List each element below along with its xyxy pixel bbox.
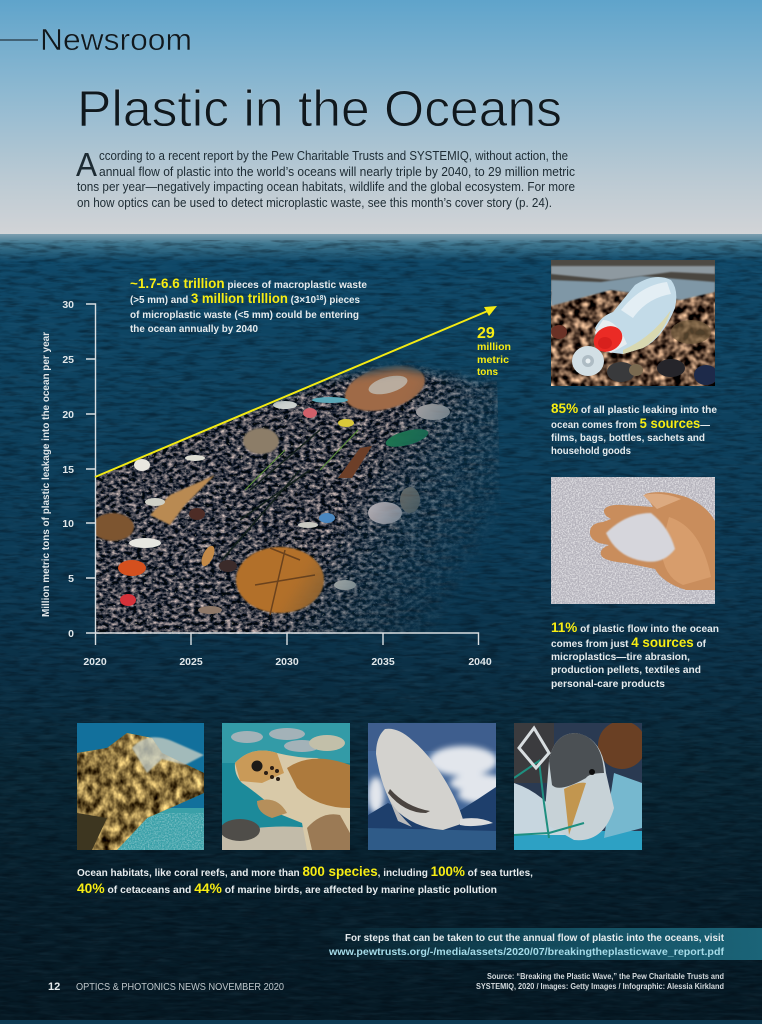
text: 11% four sources: 11% of plastic flow into the ocean	[551, 619, 719, 635]
callout: pieces of plastic waste: ~1.7-6.6 trillion pieces of macroplastic waste	[130, 275, 367, 291]
callout: 29 million metric tons: 29	[477, 325, 495, 342]
text: 11% four sources: personal-care products	[551, 678, 665, 690]
callout: 29 million metric tons: tons	[477, 366, 498, 378]
bottle	[589, 277, 676, 357]
y tick labels: 0	[68, 628, 74, 640]
link band: steps and URL	[320, 928, 762, 960]
y tick labels: 10	[62, 518, 74, 530]
title: Plastic in the Oceans	[77, 80, 562, 137]
callout: pieces of plastic waste	[130, 275, 367, 335]
x tick labels: 2035	[371, 656, 395, 668]
link band: steps and URL: For steps that can be taken to cut the annual flow of plastic into the oceans, visit	[345, 932, 724, 944]
caption: species affected	[77, 863, 533, 896]
text: 85% five sources: 85% of all plastic leaking into the	[551, 400, 717, 416]
callout: pieces of plastic waste: )	[323, 294, 327, 306]
y tick labels: 25	[62, 354, 74, 366]
x tick labels: 2020	[83, 656, 107, 668]
callout: 29 million metric tons: million	[477, 341, 511, 353]
trend arrow	[95, 306, 497, 477]
footer: page number and publication: OPTICS & PHOTONICS NEWS NOVEMBER 2020	[76, 982, 284, 993]
intro text block: on how optics can be used to detect microplastic waste, see this month’s cover story (p. 24).	[77, 196, 552, 210]
x tick labels	[83, 656, 492, 668]
x axis	[86, 633, 478, 645]
section label: Newsroom: Newsroom	[40, 23, 192, 57]
y tick labels: 15	[62, 464, 74, 476]
callout: 29 million metric tons	[477, 325, 511, 378]
intro text block: tons per year—negatively impacting ocean habitats, wildlife and the global ecosystem. For more	[77, 180, 575, 194]
callout: 29 million metric tons: metric	[477, 354, 509, 366]
source credit	[476, 972, 724, 991]
photo: hand with plastic pellets	[551, 477, 715, 604]
chart image: floating plastic debris	[96, 361, 500, 634]
callout: pieces of plastic waste: pieces	[330, 294, 362, 306]
intro text block: A	[76, 146, 97, 183]
intro text block: annual flow of plastic into the world’s oceans will nearly triple by 2040, to 29 million metric	[99, 165, 575, 179]
callout: pieces of plastic waste: of microplastic waste (<5 mm) could be entering	[130, 309, 359, 321]
y tick labels: 5	[68, 573, 74, 585]
photo: plastic bottle on pebbles	[551, 260, 715, 386]
text: 11% four sources: production pellets, textiles and	[551, 664, 701, 676]
y tick labels	[62, 299, 74, 640]
text: 11% four sources	[551, 619, 719, 690]
text: 85% five sources: ocean comes from 5 sources—	[551, 415, 710, 431]
text: 11% four sources: comes from just 4 sources of	[551, 634, 706, 650]
y axis	[86, 304, 96, 633]
bottle cap	[572, 346, 604, 376]
y tick labels: 30	[62, 299, 74, 311]
hand	[590, 492, 715, 590]
y tick labels: 20	[62, 409, 74, 421]
text: 11% four sources: microplastics—tire abrasion,	[551, 651, 690, 663]
caption: species affected: 40% of cetaceans and 44% of marine birds, are affected by marine plastic pollution	[77, 880, 497, 896]
photo: coral reef with plastic	[77, 723, 204, 850]
photo: seabird entangled in netting	[514, 723, 642, 850]
x tick labels: 2030	[275, 656, 299, 668]
pellet mound	[606, 513, 675, 562]
photo: sea turtle	[222, 723, 350, 850]
background: ocean	[0, 234, 762, 1024]
callout: pieces of plastic waste: the ocean annually by 2040	[130, 323, 258, 335]
x tick labels: 2040	[468, 656, 492, 668]
text: 85% five sources	[551, 400, 717, 457]
source credit: SYSTEMIQ, 2020 / Images: Getty Images / Infographic: Alessia Kirkland	[476, 982, 724, 991]
source credit: Source: “Breaking the Plastic Wave,” the Pew Charitable Trusts and	[487, 972, 724, 981]
callout: pieces of plastic waste: (>5 mm) and 3 million trillion (3×10	[130, 290, 318, 306]
y axis title: Million metric tons of plastic leakage into the ocean per year	[40, 332, 52, 617]
background: sky	[0, 0, 762, 235]
text: 85% five sources: films, bags, bottles, sachets and	[551, 432, 705, 444]
intro text block	[76, 146, 575, 210]
text: 85% five sources: household goods	[551, 445, 631, 457]
link band: steps and URL: www.pewtrusts.org/-/media/assets/2020/07/breakingtheplasticwave_report.pdf	[328, 946, 725, 958]
intro text block: ccording to a recent report by the Pew Charitable Trusts and SYSTEMIQ, without action, the	[99, 149, 568, 163]
footer: page number and publication: 12	[48, 981, 60, 993]
callout: pieces of plastic waste: 18	[316, 295, 323, 302]
caption: species affected: Ocean habitats, like coral reefs, and more than 800 species, including 100% of sea turtles,	[77, 863, 533, 879]
x tick labels: 2025	[179, 656, 203, 668]
photo: whale with cloudy sky	[368, 723, 496, 850]
chart: plastic leakage 2020-2040	[40, 275, 511, 668]
